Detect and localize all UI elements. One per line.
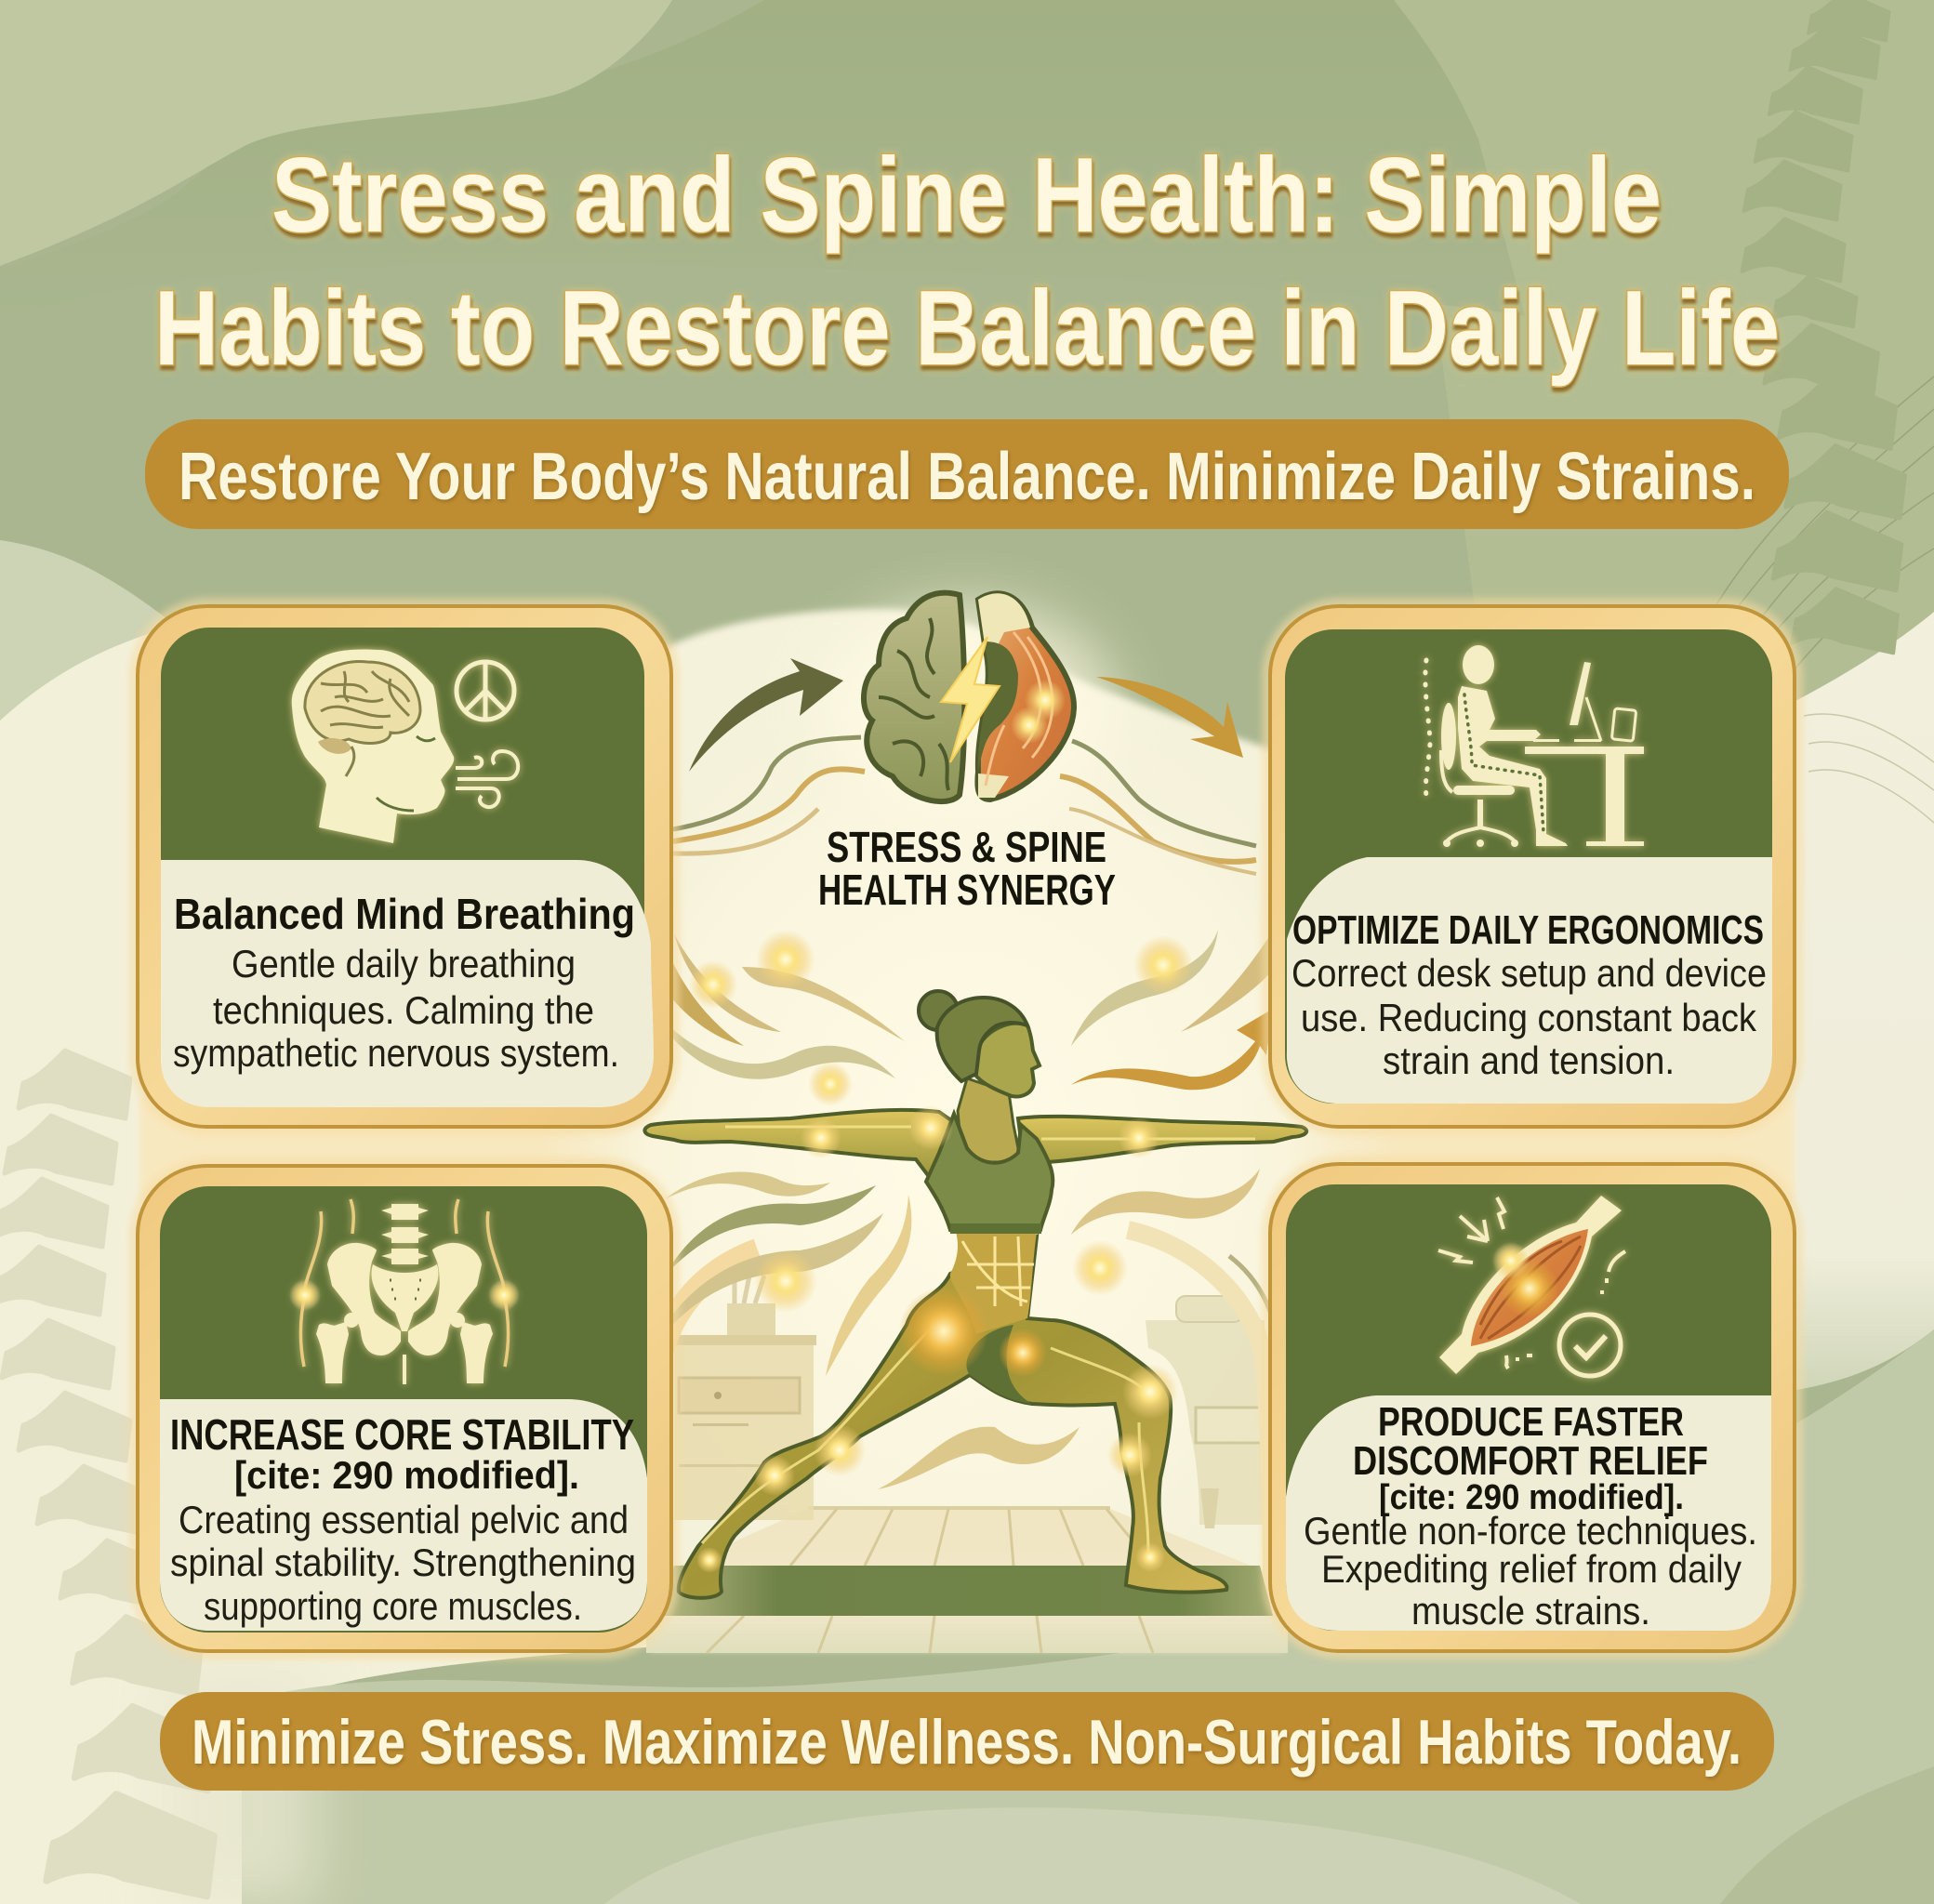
title: Stress and Spine Health: Simple <box>272 137 1662 255</box>
room: dresser <box>671 1266 816 1520</box>
yoga mat <box>655 1566 1273 1616</box>
body text: Gentle daily breathing <box>232 942 576 985</box>
gold arches around the room <box>656 1230 1283 1580</box>
bottom banner <box>160 1692 1774 1791</box>
icon: relieved muscle with check <box>1438 1196 1625 1376</box>
body text: sympathetic nervous system. <box>173 1031 619 1075</box>
arrow: gold out of brain <box>1096 677 1243 758</box>
caption area <box>1286 1395 1771 1631</box>
connector waves <box>673 737 1256 874</box>
arrow: gold to ergonomics <box>1071 1009 1273 1090</box>
panel: produce faster discomfort relief <box>1268 1162 1796 1653</box>
heading: OPTIMIZE DAILY ERGONOMICS <box>1292 907 1764 953</box>
spine silhouette: top right <box>1742 0 1905 653</box>
body text <box>1292 951 1767 1082</box>
body text: use. Reducing constant back <box>1301 996 1757 1039</box>
heading: PRODUCE FASTER <box>1378 1399 1684 1445</box>
body text: supporting core muscles. <box>204 1584 582 1628</box>
body text: Gentle non-force techniques. <box>1304 1509 1757 1553</box>
caption area <box>1287 857 1772 1104</box>
panel: produce faster discomfort relief: [cite: 290 modified]. <box>1379 1478 1684 1517</box>
panel: center scene backdrop <box>139 604 1795 1650</box>
title <box>154 137 1780 388</box>
panel: produce faster discomfort relief: DISCOMFORT RELIEF <box>1353 1438 1708 1484</box>
panel: balanced mind breathing <box>136 604 673 1129</box>
body text <box>173 942 619 1075</box>
caption area <box>161 860 654 1107</box>
body text: strain and tension. <box>1383 1038 1675 1082</box>
body text: spinal stability. Strengthening <box>170 1540 636 1584</box>
illustration: warrior yoga figure <box>644 991 1306 1598</box>
icon: head with brain, peace sign and breath <box>292 649 518 843</box>
center caption: STRESS & SPINE <box>827 823 1106 871</box>
panel: optimize daily ergonomics <box>1268 604 1796 1129</box>
panel: increase core stability: [cite: 290 modified]. <box>234 1453 579 1497</box>
body text: Expediting relief from daily <box>1321 1547 1742 1591</box>
spine silhouette: lower left <box>0 1051 214 1897</box>
icon: person at ergonomic desk <box>1425 645 1644 847</box>
top banner <box>145 419 1789 529</box>
panel: increase core stability <box>136 1164 673 1653</box>
room: floor <box>646 1506 1288 1653</box>
body text: Correct desk setup and device <box>1292 951 1767 995</box>
body text: techniques. Calming the <box>213 988 594 1032</box>
center caption <box>818 823 1116 914</box>
body text: Creating essential pelvic and <box>179 1498 629 1541</box>
icon: pelvis and spine <box>289 1199 520 1384</box>
body text <box>170 1498 636 1628</box>
heading: INCREASE CORE STABILITY <box>170 1410 634 1459</box>
body text <box>1304 1509 1757 1633</box>
heading: Balanced Mind Breathing <box>174 890 635 938</box>
flowing energy swooshes <box>642 865 1276 1489</box>
contour lines: upper right <box>1711 377 1934 823</box>
icon: brain and muscle synergy <box>864 593 1074 801</box>
caption area <box>160 1399 647 1631</box>
floating glow dots <box>689 930 1193 1313</box>
arrow: dark into brain <box>689 658 843 772</box>
body text: muscle strains. <box>1411 1589 1650 1633</box>
room: armchair <box>1146 1296 1265 1528</box>
center caption: HEALTH SYNERGY <box>818 866 1116 914</box>
